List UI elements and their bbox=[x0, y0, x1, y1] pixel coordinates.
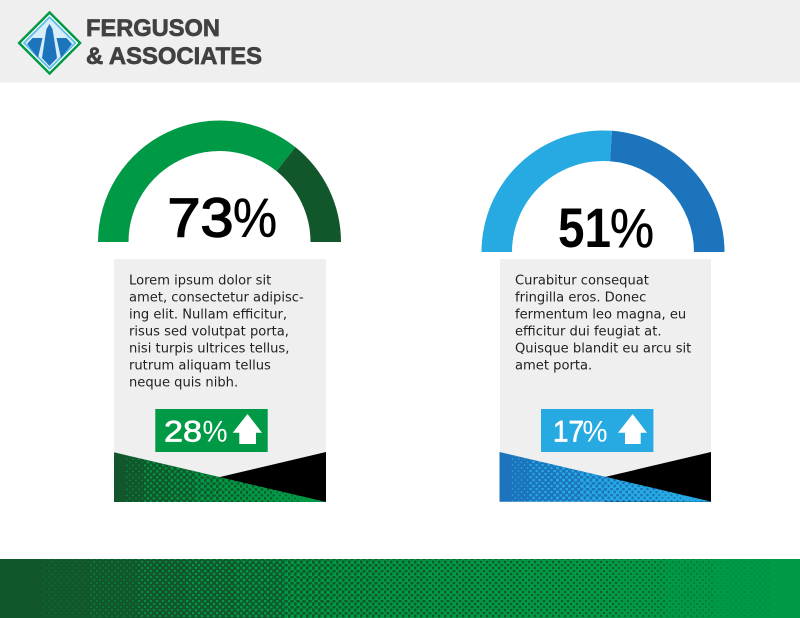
logo mark bbox=[17, 11, 82, 75]
gauge: 51 percent bbox=[482, 130, 724, 252]
body text: efficitur dui feugiat at. bbox=[515, 324, 662, 340]
gauge value bbox=[168, 186, 277, 248]
body text: neque quis nibh. bbox=[129, 376, 238, 390]
change badge: 28 percent up bbox=[155, 409, 268, 452]
company name: & ASSOCIATES bbox=[86, 43, 262, 70]
card background bbox=[114, 259, 326, 502]
body text: risus sed volutpat porta, bbox=[129, 324, 289, 340]
panel: left green card bbox=[98, 121, 341, 502]
footer halftone band bbox=[0, 559, 800, 618]
change badge: 28 percent up: % bbox=[202, 416, 228, 448]
body text: Lorem ipsum dolor sit bbox=[129, 274, 271, 288]
gauge: 73 percent bbox=[98, 121, 341, 242]
header band bbox=[0, 0, 800, 82]
change badge: 17 percent up: 17 bbox=[553, 416, 584, 448]
change badge: 17 percent up: % bbox=[582, 416, 608, 448]
icon: up arrow bbox=[618, 414, 647, 444]
gauge value bbox=[558, 196, 654, 259]
body text: amet porta. bbox=[515, 358, 592, 374]
panel: right blue card bbox=[482, 130, 724, 502]
gauge value: % bbox=[610, 197, 654, 259]
body text: Quisque blandit eu arcu sit bbox=[515, 342, 691, 356]
gauge value: % bbox=[233, 186, 277, 248]
change badge: 17 percent up bbox=[541, 409, 653, 452]
company name: FERGUSON bbox=[86, 15, 220, 42]
change badge: 28 percent up: 28 bbox=[164, 416, 202, 448]
card footer chevron bbox=[114, 452, 326, 502]
body text: fermentum leo magna, eu bbox=[515, 308, 686, 322]
body text: rutrum aliquam tellus bbox=[129, 358, 271, 374]
card background bbox=[500, 259, 711, 502]
body text: fringilla eros. Donec bbox=[515, 290, 646, 306]
gauge value: 51 bbox=[558, 196, 611, 259]
body text: ing elit. Nullam efficitur, bbox=[129, 308, 287, 322]
company name bbox=[86, 15, 262, 70]
body text: nisi turpis ultrices tellus, bbox=[129, 342, 289, 356]
card footer chevron bbox=[500, 452, 712, 502]
gauge value: 73 bbox=[168, 186, 234, 248]
body text: Curabitur consequat bbox=[515, 274, 649, 288]
icon: up arrow bbox=[233, 414, 262, 444]
body text: amet, consectetur adipisc- bbox=[129, 290, 304, 306]
